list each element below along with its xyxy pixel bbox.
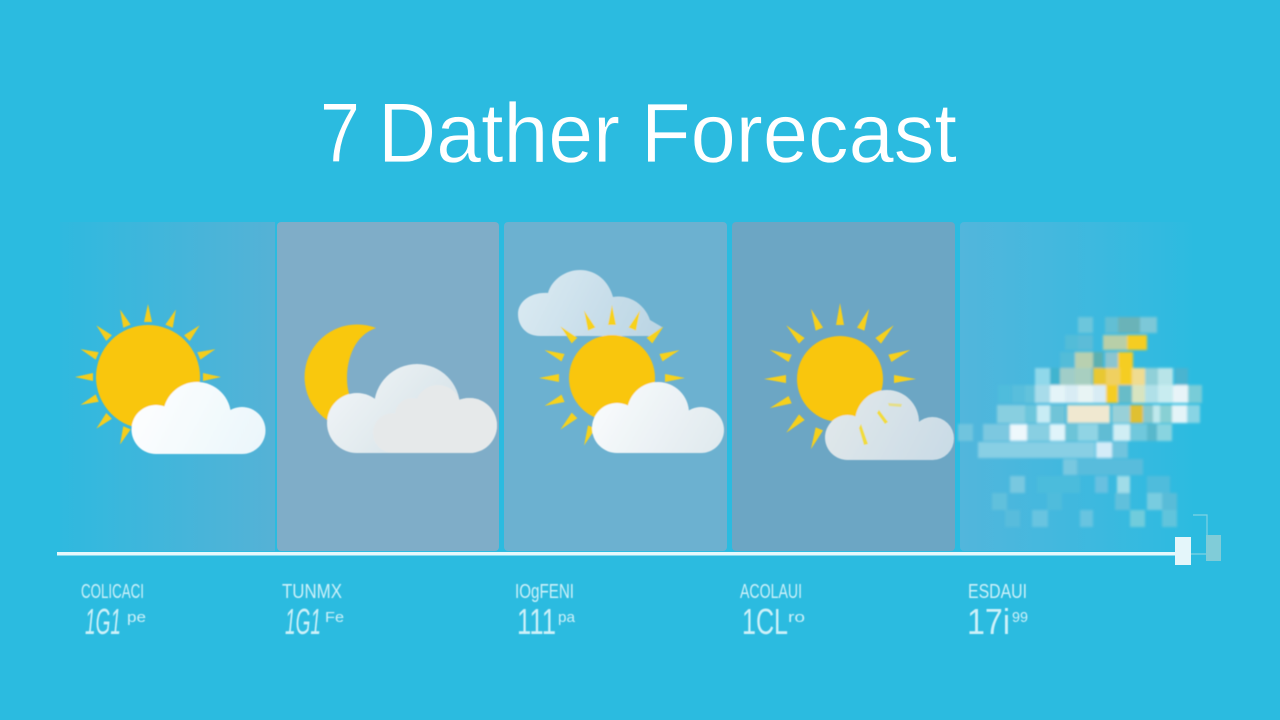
title: 7 [320, 86, 360, 180]
icon: crescent moon with cloud [305, 324, 497, 453]
icon: pixelated storm cloud [958, 317, 1202, 527]
panel: day 4 [732, 222, 955, 551]
day 4 label: ro [788, 609, 805, 626]
day 2 label [282, 581, 344, 642]
timeline end marker [1175, 537, 1191, 565]
day 4 label: ACOLAUI [740, 581, 802, 603]
sun disc [569, 335, 655, 421]
icon: sun between two clouds [518, 270, 724, 453]
sun rays [539, 305, 685, 447]
cloud [825, 390, 954, 460]
title [320, 86, 957, 180]
day 4 label [740, 581, 805, 642]
cloud [327, 364, 497, 453]
day 4 label: 1CL [742, 601, 788, 642]
day 3 label: 111 [517, 601, 556, 642]
day 5 label: 99 [1012, 609, 1028, 626]
title: Dather [378, 86, 620, 180]
title: Forecast [641, 86, 957, 180]
day 3 label [515, 581, 576, 642]
day labels and temperatures [81, 581, 1028, 642]
day 5 label: ESDAUI [968, 581, 1027, 603]
icon: sun with grey cloud [764, 303, 954, 460]
day 1 label: pe [127, 609, 146, 626]
timeline [57, 515, 1221, 565]
day 2 label: TUNMX [282, 581, 342, 603]
day 1 label: 1G1 [85, 601, 121, 642]
panel: day 1 [60, 222, 275, 551]
day 1 label [81, 581, 146, 642]
upper cloud [518, 270, 662, 336]
sun rays [764, 303, 916, 451]
day 3 label: IOgFENI [515, 581, 574, 603]
sun disc [96, 325, 200, 429]
panel: day 5 [958, 222, 1202, 551]
lower cloud [592, 382, 724, 453]
cloud [132, 382, 266, 454]
icon: sun with white cloud [75, 304, 266, 454]
day 2 label: Fe [325, 609, 344, 626]
day 5 label: 17i [967, 601, 1010, 642]
sun rays [75, 304, 221, 446]
panel: day 3 [504, 222, 727, 551]
day 1 label: COLICACI [81, 581, 144, 603]
day 3 label: pa [558, 609, 576, 626]
sun disc [797, 336, 883, 422]
day 2 label: 1G1 [285, 601, 321, 642]
timeline secondary marker [1206, 535, 1221, 561]
day 5 label [967, 581, 1028, 642]
front cloud [373, 385, 497, 453]
panel: day 2 [277, 222, 499, 551]
yellow streaks on cloud [859, 403, 902, 445]
moon [305, 324, 376, 420]
